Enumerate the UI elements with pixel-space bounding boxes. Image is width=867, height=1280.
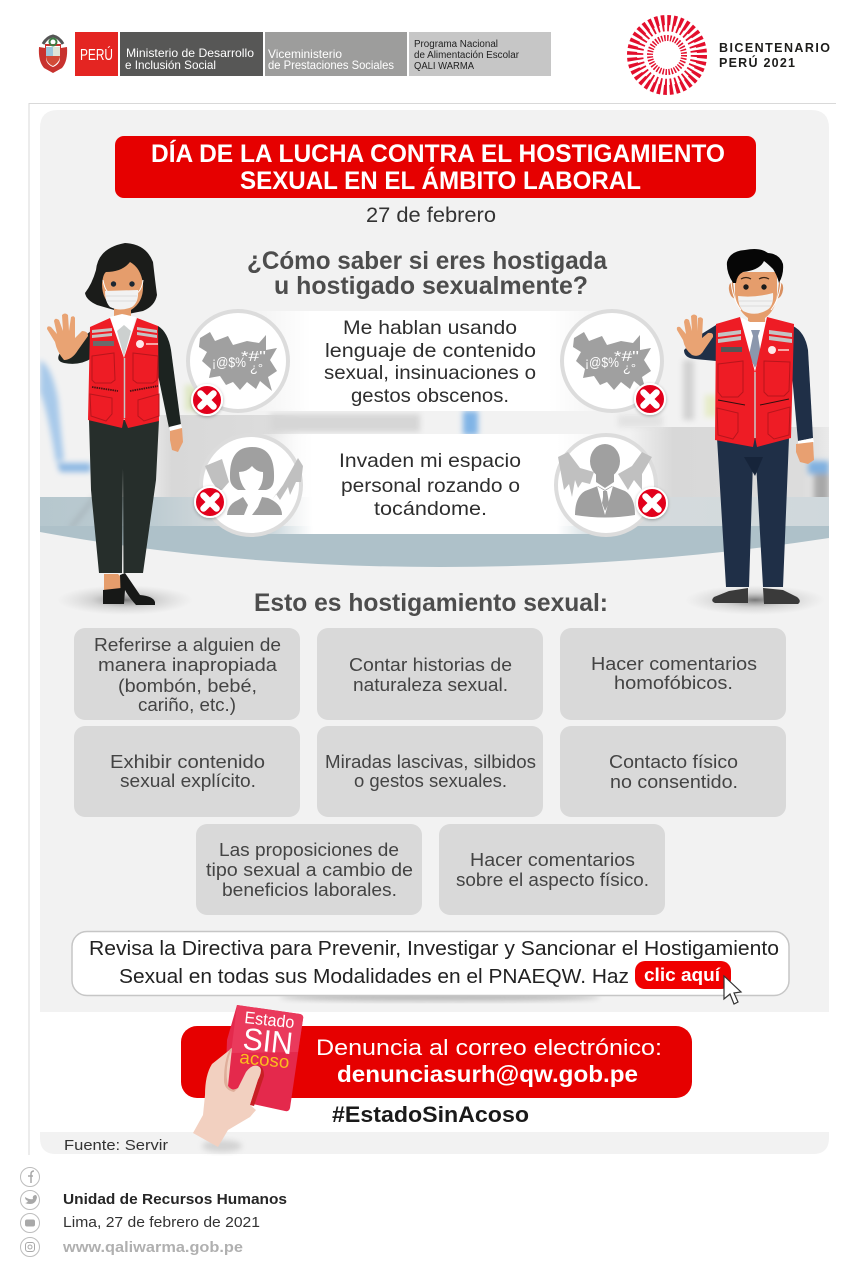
logo text: Bicentenario Perú 2021: PERÚ 2021 [719, 55, 795, 70]
callout: directive link: Revisa la Directiva para Prevenir, Investigar y Sancionar el Hostigamiento [89, 937, 779, 960]
card: looks and whistles: o gestos sexuales. [354, 770, 507, 791]
source: Fuente: Servir [64, 1137, 168, 1154]
card: sexual propositions: tipo sexual a cambio de [206, 859, 413, 880]
man hair [727, 249, 783, 283]
card: physical contact: no consentido. [610, 771, 738, 792]
panel: speech row: Me hablan usando [343, 317, 517, 339]
panel: speech row [250, 311, 610, 411]
card: explicit content: Exhibir contenido [110, 751, 265, 772]
footer credits: www.qaliwarma.gob.pe [62, 1240, 243, 1256]
panel: speech row: sexual, insinuaciones o [324, 362, 536, 384]
icon: red cross [635, 384, 665, 414]
callout: directive link: Sexual en todas sus Modalidades en el PNAEQW. Haz [119, 965, 629, 988]
heading: how to know [247, 247, 608, 300]
card: sexual stories [317, 628, 543, 720]
footer credits [62, 1192, 287, 1256]
icon: offensive speech right: *#" [614, 348, 639, 365]
page frame lines [29, 104, 836, 1155]
card: inappropriate names [74, 628, 300, 720]
red card [225, 1005, 303, 1111]
icon: coat of arms [39, 36, 67, 73]
heading: how to know: ¿Cómo saber si eres hostigada [247, 247, 608, 275]
icon: offensive speech right [562, 311, 662, 411]
footer credits: Unidad de Recursos Humanos [63, 1192, 287, 1208]
man face [735, 272, 777, 328]
card: physical contact: Contacto físico [609, 751, 738, 772]
card: homophobic comments [560, 628, 786, 720]
hand [193, 1048, 261, 1147]
card: physical appearance: Hacer comentarios [470, 849, 635, 870]
logo: Perú ministry bars: e Inclusión Social [125, 58, 216, 72]
card: homophobic comments: Hacer comentarios [591, 653, 757, 674]
logo: Perú ministry bars: de Prestaciones Sociales [268, 58, 394, 72]
logo: Perú ministry bars [75, 32, 551, 76]
heading: this is harassment: Esto es hostigamiento sexual: [254, 589, 608, 617]
icon: offensive speech left [188, 311, 288, 411]
heading: how to know: u hostigado sexualmente? [274, 272, 588, 300]
card: inappropriate names: manera inapropiada [98, 654, 278, 675]
card: sexual propositions: Las proposiciones de [219, 839, 399, 860]
main grey panel [40, 110, 829, 1154]
man pants [717, 438, 789, 587]
icon: offensive speech left: ¿° [250, 361, 263, 375]
man shirt and tie [736, 317, 776, 405]
icon: red cross [192, 385, 222, 415]
callout: directive link: clic aquí [644, 965, 721, 985]
panel: touching row: personal rozando o [341, 475, 520, 497]
illustration: hand holding card: Estado [244, 1008, 295, 1032]
banner: report by email [181, 1026, 692, 1098]
man shoes [712, 588, 748, 603]
header logos [39, 20, 830, 90]
card: sexual stories: Contar historias de [349, 654, 512, 675]
icon: offensive speech left: *#" [241, 348, 266, 365]
icon: man harassed [556, 435, 656, 535]
logo: Perú ministry bars: QALI WARMA [414, 61, 474, 72]
logo: Bicentenario ring [632, 20, 702, 90]
panel: speech row: lenguaje de contenido [325, 340, 536, 362]
card: inappropriate names: (bombón, bebé, [118, 675, 257, 696]
card: homophobic comments: homofóbicos. [614, 672, 733, 693]
icon: red cross [637, 488, 667, 518]
card: sexual propositions: beneficios laborales. [222, 879, 397, 900]
logo: Perú ministry bars: Ministerio de Desarrollo [126, 46, 254, 60]
card: physical contact [560, 726, 786, 817]
footer credits: Lima, 27 de febrero de 2021 [63, 1215, 260, 1231]
title banner: SEXUAL EN EL ÁMBITO LABORAL [240, 166, 641, 195]
icon: red cross [195, 487, 225, 517]
man mask [738, 293, 773, 314]
hashtag: #EstadoSinAcoso [332, 1102, 529, 1127]
woman hand [47, 314, 88, 360]
illustration: hand holding card [193, 1005, 303, 1152]
card: sexual propositions [196, 824, 422, 915]
card: looks and whistles: Miradas lascivas, silbidos [325, 751, 536, 772]
card: physical appearance [439, 824, 665, 915]
blurred office background [40, 360, 845, 567]
logo: Perú ministry bars: de Alimentación Escolar [414, 50, 520, 61]
man arms [684, 325, 716, 361]
callout: directive link [72, 932, 789, 1004]
card: inappropriate names: Referirse a alguien de [94, 634, 281, 655]
icon: offensive speech right: ¡@$% [585, 354, 619, 370]
card: explicit content: sexual explícito. [120, 770, 256, 791]
logo: Perú ministry bars: Viceministerio [268, 47, 342, 61]
woman left arm [58, 330, 92, 364]
woman shoes [104, 574, 122, 603]
illustration: hand holding card: acoso [239, 1047, 290, 1072]
social media icons [20, 1168, 40, 1256]
woman hair [85, 243, 157, 314]
icon: woman harassed [201, 435, 303, 535]
banner: report by email: denunciasurh@qw.gob.pe [337, 1061, 638, 1087]
figure: woman with stop gesture [47, 243, 193, 615]
woman right arm [158, 326, 181, 428]
logo text: Bicentenario Perú 2021: BICENTENARIO [719, 41, 830, 55]
panel: speech row: gestos obscenos. [351, 385, 509, 407]
banner: report by email: Denuncia al correo electrónico: [316, 1035, 662, 1060]
card: inappropriate names: cariño, etc.) [138, 694, 236, 715]
card: sexual stories: naturaleza sexual. [353, 674, 508, 695]
figure: man with stop gesture [677, 249, 825, 615]
icon: offensive speech left: ¡@$% [212, 354, 246, 370]
illustration: hand holding card: SIN [241, 1021, 295, 1061]
icon: mouse cursor [724, 976, 741, 1004]
logo: Perú ministry bars: Programa Nacional [414, 39, 498, 50]
logo text: Bicentenario Perú 2021 [719, 41, 830, 70]
logo: Perú ministry bars: PERÚ [80, 45, 113, 64]
card: physical appearance: sobre el aspecto físico. [456, 869, 649, 890]
panel: touching row: tocándome. [374, 498, 487, 520]
title banner [115, 136, 756, 198]
woman pants [89, 420, 159, 573]
date: 27 de febrero [366, 204, 496, 227]
panel: touching row [250, 434, 620, 534]
woman vest [88, 318, 159, 428]
woman face [102, 262, 143, 318]
woman mask [105, 290, 138, 310]
man ears [729, 282, 783, 299]
panel: touching row: Invaden mi espacio [339, 450, 521, 472]
title banner: DÍA DE LA LUCHA CONTRA EL HOSTIGAMIENTO [151, 139, 725, 168]
card: looks and whistles [317, 726, 543, 817]
icon: offensive speech right: ¿° [623, 361, 636, 375]
card: explicit content [74, 726, 300, 817]
man vest [715, 317, 794, 447]
